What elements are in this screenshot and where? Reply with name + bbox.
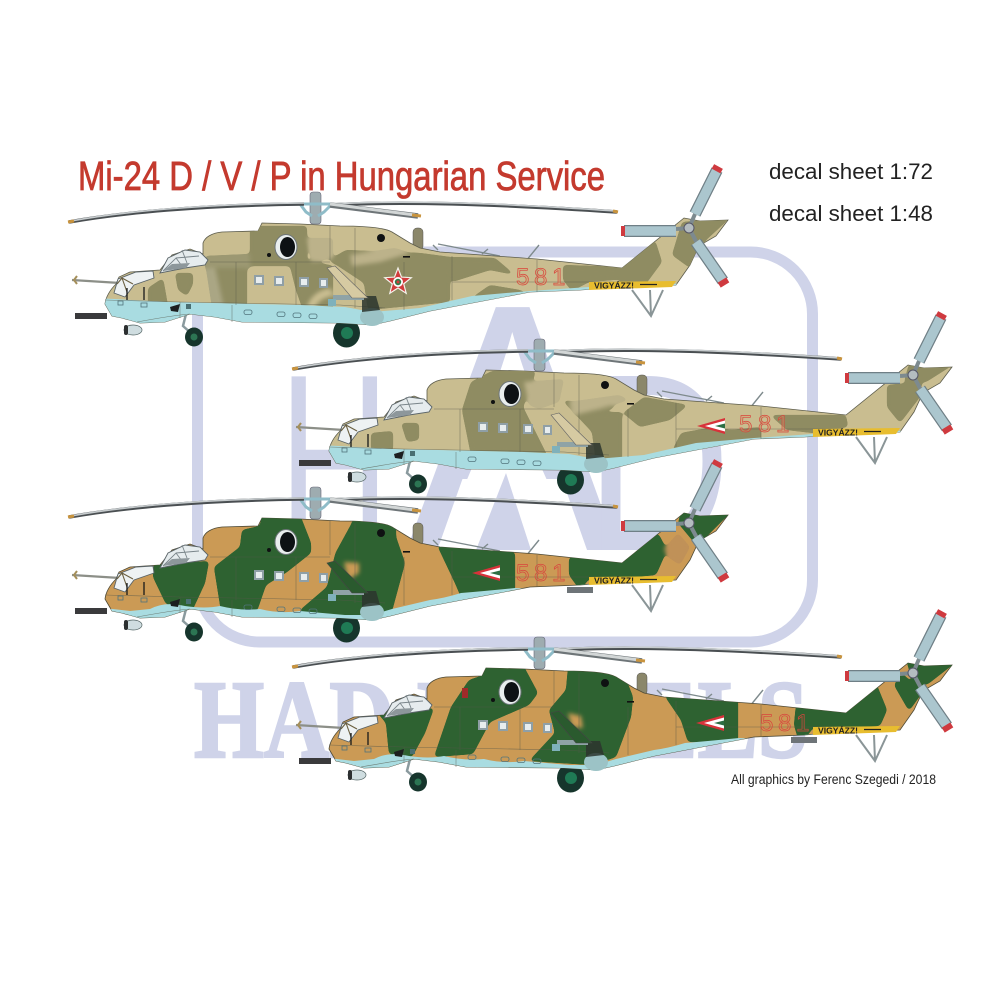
credit line: All graphics by Ferenc Szegedi / 2018 bbox=[731, 772, 936, 787]
yellow warning strip bbox=[813, 428, 900, 438]
watermark: HAD Models logo: H bbox=[279, 323, 389, 604]
yellow warning strip bbox=[589, 281, 676, 290]
watermark: HAD Models logo: A bbox=[406, 231, 619, 626]
decal sheet 1:72 label: decal sheet 1:72 bbox=[769, 159, 933, 184]
insignia: chevron bbox=[472, 565, 500, 581]
number 581: 581 bbox=[516, 264, 565, 291]
yellow warning strip: VIGYÁZZ! bbox=[818, 428, 858, 438]
watermark: HAD Models logo: HAD MODELS bbox=[194, 659, 808, 782]
yellow warning strip: VIGYÁZZ! bbox=[818, 726, 858, 736]
yellow warning strip bbox=[813, 726, 900, 736]
helicopter 1: sand camouflage with star bbox=[68, 166, 730, 348]
yellow warning strip: VIGYÁZZ! bbox=[594, 282, 634, 290]
helicopter 3: green and orange camouflage bbox=[68, 462, 734, 642]
watermark: HAD Models logo bbox=[194, 231, 812, 782]
watermark: HAD Models logo: D bbox=[585, 321, 731, 604]
helicopter 2: sand camouflage with chevron bbox=[292, 314, 956, 494]
yellow warning strip: VIGYÁZZ! bbox=[594, 576, 634, 586]
number 581: 581 bbox=[760, 710, 809, 737]
yellow warning strip bbox=[589, 576, 676, 586]
number 581: 581 bbox=[739, 411, 789, 438]
title: Mi-24 D / V / P in Hungarian Service bbox=[78, 153, 605, 199]
insignia: red star bbox=[385, 268, 411, 293]
decal sheet 1:48 label: decal sheet 1:48 bbox=[769, 201, 933, 226]
helicopter 4: green and orange camouflage bbox=[292, 612, 960, 792]
insignia: chevron bbox=[697, 418, 725, 434]
number 581: 581 bbox=[516, 560, 565, 587]
insignia: chevron bbox=[696, 715, 724, 731]
